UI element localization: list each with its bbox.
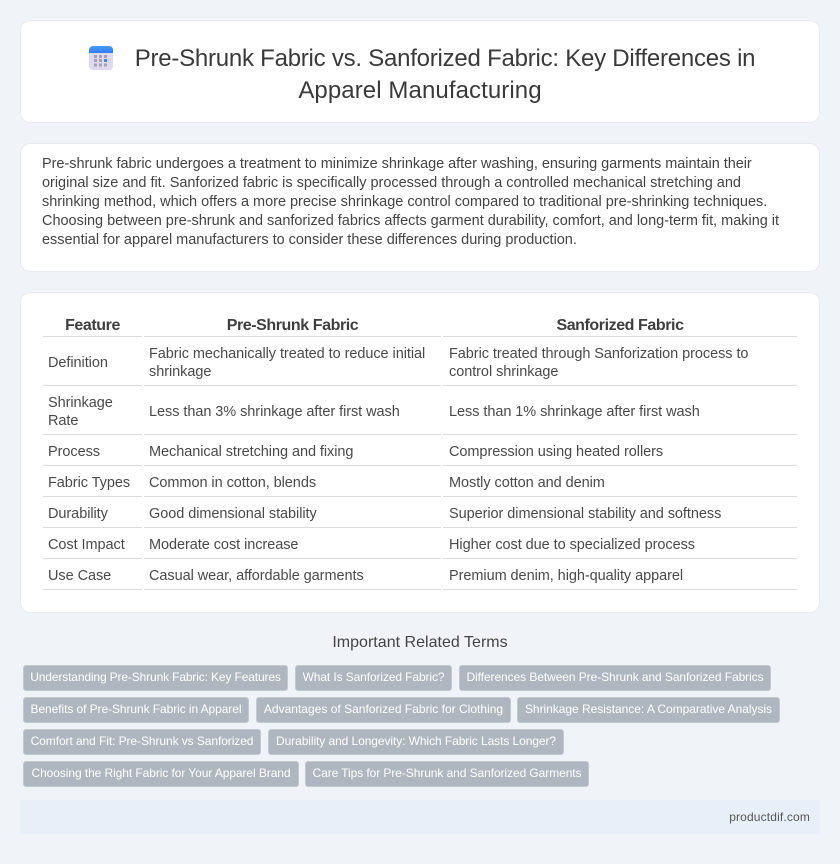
footer bar bbox=[20, 800, 820, 834]
cell: pre-shrunk cost: Moderate cost increase bbox=[149, 537, 298, 553]
cell: pre-shrunk use: Casual wear, affordable garments bbox=[149, 568, 364, 584]
cell: pre-shrunk definition: shrinkage bbox=[149, 364, 211, 380]
cell: sanforized definition: Fabric treated through Sanforization process to bbox=[449, 346, 748, 362]
intro paragraph bbox=[42, 156, 779, 248]
row: Use Case: Use Case bbox=[48, 568, 111, 584]
cell: sanforized durability: Superior dimensional stability and softness bbox=[449, 506, 721, 522]
intro paragraph: Choosing between pre-shrunk and sanforized fabrics affects garment durability, comfort, and long-term fit, making it bbox=[42, 213, 779, 229]
title: Pre-Shrunk Fabric vs. Sanforized Fabric: Key Differences in bbox=[135, 45, 755, 72]
intro paragraph: original size and fit. Sanforized fabric is specifically processed through a controlled mechanical stretching and bbox=[42, 175, 741, 191]
tags: related terms: Understanding Pre-Shrunk Fabric: Key Features bbox=[30, 670, 281, 684]
cell: pre-shrunk durability: Good dimensional stability bbox=[149, 506, 317, 522]
tags: related terms: Advantages of Sanforized Fabric for Clothing bbox=[264, 702, 503, 716]
heading: important related terms: Important Related Terms bbox=[332, 634, 508, 651]
tags: related terms: Shrinkage Resistance: A Comparative Analysis bbox=[525, 702, 772, 716]
cell: sanforized cost: Higher cost due to specialized process bbox=[449, 537, 695, 553]
cell: pre-shrunk definition: Fabric mechanically treated to reduce initial bbox=[149, 346, 425, 362]
cell: sanforized process: Compression using heated rollers bbox=[449, 444, 663, 460]
intro paragraph: Pre-shrunk fabric undergoes a treatment to minimize shrinkage after washing, ensuring garments maintain their bbox=[42, 156, 752, 172]
tags: related terms: What Is Sanforized Fabric? bbox=[303, 670, 444, 684]
panel: intro text bbox=[20, 143, 820, 272]
panel: header bbox=[20, 20, 820, 123]
cell: sanforized use: Premium denim, high-quality apparel bbox=[449, 568, 683, 584]
row: Cost Impact: Cost Impact bbox=[48, 537, 125, 553]
table header: Feature: Feature bbox=[65, 317, 120, 334]
icon: calendar bbox=[89, 46, 113, 70]
cell: pre-shrunk rate: Less than 3% shrinkage after first wash bbox=[149, 404, 400, 420]
panel: comparison table bbox=[20, 292, 820, 613]
footer source text: productdif.com bbox=[729, 810, 810, 824]
table header: Pre-Shrunk Fabric: Pre-Shrunk Fabric bbox=[227, 317, 358, 334]
cell: pre-shrunk process: Mechanical stretching and fixing bbox=[149, 444, 353, 460]
cell: pre-shrunk definition bbox=[149, 346, 425, 380]
cell: sanforized definition bbox=[449, 346, 748, 380]
row: Durability: Durability bbox=[48, 506, 108, 522]
row: Shrinkage Rate bbox=[48, 395, 113, 429]
row: Definition: Definition bbox=[48, 355, 108, 371]
title bbox=[135, 45, 755, 104]
cell: sanforized rate: Less than 1% shrinkage after first wash bbox=[449, 404, 700, 420]
intro paragraph: essential for apparel manufacturers to consider these differences during production. bbox=[42, 232, 577, 248]
intro paragraph: shrinking method, which offers a more precise shrinkage control compared to traditional pre-shrinking techniques. bbox=[42, 194, 767, 210]
row: Fabric Types: Fabric Types bbox=[48, 475, 130, 491]
row: Shrinkage Rate: Rate bbox=[48, 413, 78, 429]
cell: sanforized definition: control shrinkage bbox=[449, 364, 558, 380]
tags: related terms bbox=[23, 665, 780, 787]
tags: related terms: Care Tips for Pre-Shrunk and Sanforized Garments bbox=[313, 766, 581, 780]
title: Apparel Manufacturing bbox=[298, 77, 542, 104]
row: Process: Process bbox=[48, 444, 100, 460]
tags: related terms: Comfort and Fit: Pre-Shrunk vs Sanforized bbox=[31, 734, 253, 748]
tags: related terms: Choosing the Right Fabric for Your Apparel Brand bbox=[32, 766, 290, 780]
tags: related terms: Durability and Longevity: Which Fabric Lasts Longer? bbox=[276, 734, 556, 748]
tags: related terms: Differences Between Pre-Shrunk and Sanforized Fabrics bbox=[466, 670, 764, 684]
table header: Sanforized Fabric: Sanforized Fabric bbox=[556, 317, 684, 334]
row: Shrinkage Rate: Shrinkage bbox=[48, 395, 113, 411]
cell: pre-shrunk types: Common in cotton, blends bbox=[149, 475, 316, 491]
tags: related terms: Benefits of Pre-Shrunk Fabric in Apparel bbox=[31, 702, 241, 716]
cell: sanforized types: Mostly cotton and denim bbox=[449, 475, 605, 491]
